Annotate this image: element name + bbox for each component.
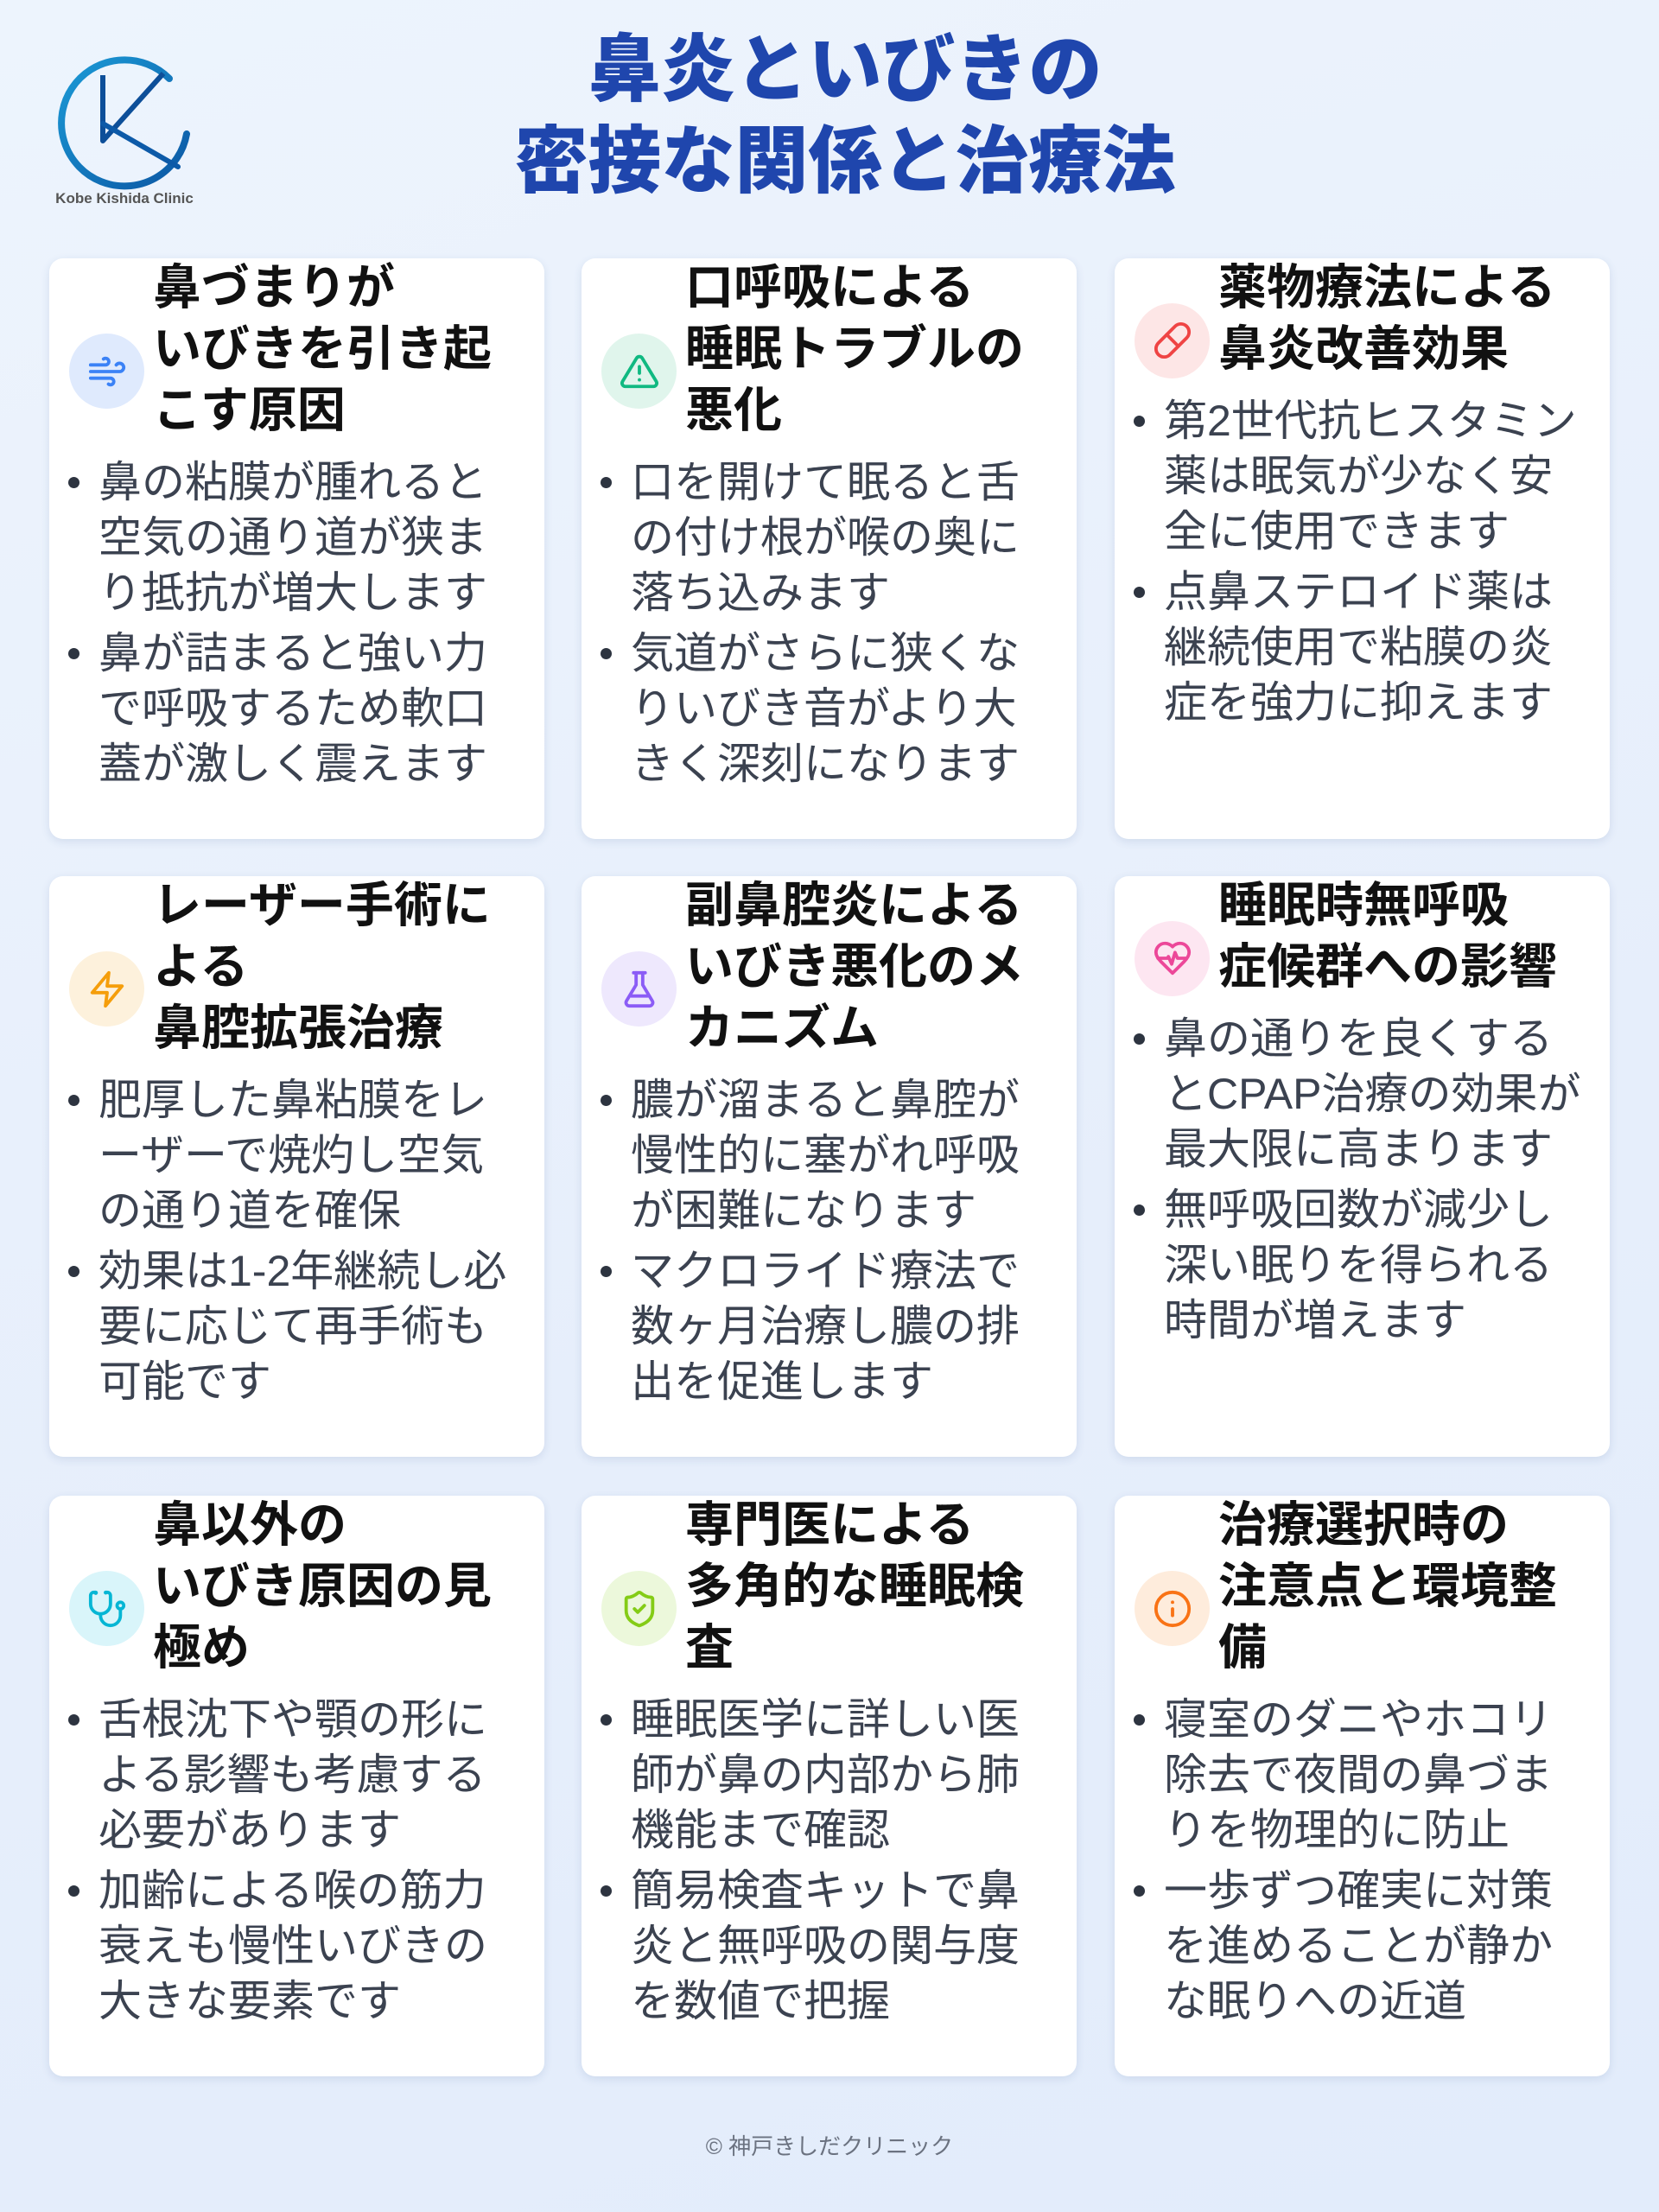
panel: card 5: 出を促進します	[631, 1357, 933, 1406]
panel: card 6: とCPAP治療の効果が	[1164, 1070, 1580, 1118]
panel: card 7: 舌根沈下や顎の形に	[99, 1695, 487, 1744]
panel: card 8: 多角的な睡眠検	[685, 1559, 1024, 1613]
panel: card 6: 深い眠りを得られる	[1164, 1241, 1553, 1289]
panel: card 7: 衰えも慢性いびきの	[99, 1922, 487, 1970]
panel: card 5: いびき悪化のメ	[685, 939, 1024, 994]
panel: card 1: 鼻づまりが	[153, 260, 395, 315]
panel: card 8: 炎と無呼吸の関与度	[631, 1922, 1020, 1970]
panel: card 3: 鼻炎改善効果	[1218, 321, 1509, 376]
panel: card 6: 時間が増えます	[1164, 1296, 1466, 1344]
icon: wind	[69, 334, 144, 409]
panel: card 4	[49, 876, 544, 1457]
panel: card 6: 睡眠時無呼吸	[1218, 878, 1509, 932]
panel: card 8: 師が鼻の内部から肺	[631, 1751, 1020, 1799]
panel: card 5: 慢性的に塞がれ呼吸	[631, 1131, 1020, 1179]
panel: card 7: 極め	[153, 1620, 250, 1675]
panel: card 1: いびきを引き起	[153, 321, 492, 376]
panel: card 6: 最大限に高まります	[1164, 1125, 1553, 1173]
panel: card 4: レーザー手術に	[153, 878, 491, 932]
panel: card 6: 鼻の通りを良くする	[1164, 1014, 1553, 1063]
panel: card 5: カニズム	[685, 1001, 879, 1055]
panel: card 8: 査	[685, 1620, 734, 1675]
panel: card 7: 鼻以外の	[153, 1497, 346, 1552]
panel: card 2: の付け根が喉の奥に	[631, 513, 1020, 562]
title	[514, 29, 1175, 203]
panel: card 2: きく深刻になります	[631, 740, 1020, 788]
logo	[55, 56, 194, 207]
panel: card 9: な眠りへの近道	[1164, 1977, 1466, 2025]
panel: card 4: 鼻腔拡張治療	[153, 1001, 443, 1055]
panel: card 2: 睡眠トラブルの	[685, 321, 1024, 376]
panel: card 1: 鼻の粘膜が腫れると	[99, 458, 487, 506]
icon: info	[1135, 1571, 1210, 1646]
panel: card 2: りいびき音がより大	[631, 684, 1016, 733]
panel: card 4: 要に応じて再手術も	[99, 1302, 487, 1351]
panel: card 5: 副鼻腔炎による	[685, 878, 1022, 932]
panel: card 8: 専門医による	[685, 1497, 974, 1552]
panel: card 3: 継続使用で粘膜の炎	[1164, 623, 1553, 671]
panel: card 6: 症候群への影響	[1218, 939, 1557, 994]
panel: card 8: を数値で把握	[631, 1977, 890, 2025]
panel: card 3: 全に使用できます	[1164, 507, 1510, 556]
panel: card 1: こす原因	[153, 383, 346, 437]
panel: card 7	[49, 1496, 544, 2076]
panel: card 2: 悪化	[685, 383, 782, 437]
panel: card 8: 機能まで確認	[631, 1806, 890, 1854]
panel: card 2: 口を開けて眠ると舌	[631, 458, 1020, 506]
panel: card 9: 除去で夜間の鼻づま	[1164, 1751, 1553, 1799]
panel: card 2: 落ち込みます	[631, 569, 890, 617]
panel: card 4: ーザーで焼灼し空気	[99, 1131, 484, 1179]
panel: card 1: 鼻が詰まると強い力	[99, 629, 487, 677]
panel: card 4: 肥厚した鼻粘膜をレ	[99, 1076, 487, 1124]
icon: shield check	[601, 1571, 677, 1646]
panel: card 9: りを物理的に防止	[1164, 1806, 1510, 1854]
panel: card 5: 数ヶ月治療し膿の排	[631, 1302, 1020, 1351]
panel: card 5	[582, 876, 1077, 1457]
panel: card 9: 注意点と環境整	[1218, 1559, 1557, 1613]
icon: stethoscope	[69, 1571, 144, 1646]
panel: card 8: 簡易検査キットで鼻	[631, 1866, 1020, 1915]
panel: card 2: 気道がさらに狭くな	[631, 629, 1020, 677]
panel: card 7: 大きな要素です	[99, 1977, 401, 2025]
panel: card 7: よる影響も考慮する	[99, 1751, 486, 1799]
logo: Kobe Kishida Clinic	[55, 190, 194, 207]
panel: card 1: 蓋が激しく震えます	[99, 740, 487, 788]
panel: card 1: 空気の通り道が狭ま	[99, 513, 487, 562]
panel: card 4: よる	[153, 939, 248, 994]
panel: card 2: 口呼吸による	[685, 260, 974, 315]
panel: card 5: マクロライド療法で	[631, 1247, 1020, 1295]
panel: card 3	[1115, 258, 1610, 839]
panel: card 7: いびき原因の見	[153, 1559, 492, 1613]
panel: card 8	[582, 1496, 1077, 2076]
panel: card 1: で呼吸するため軟口	[99, 684, 487, 733]
panel: card 3: 薬は眠気が少なく安	[1164, 452, 1553, 500]
panel: card 5: 膿が溜まると鼻腔が	[631, 1076, 1020, 1124]
icon: pill	[1135, 302, 1210, 378]
panel: card 9: を進めることが静か	[1164, 1922, 1553, 1970]
panel: card 4: の通り道を確保	[99, 1186, 401, 1235]
panel: card 9: 備	[1218, 1620, 1267, 1675]
panel: card 1: り抵抗が増大します	[99, 569, 487, 617]
panel: card 9	[1115, 1496, 1610, 2076]
icon: heart pulse	[1135, 921, 1210, 995]
icon: flask	[601, 951, 677, 1027]
panel: card 3: 薬物療法による	[1218, 260, 1555, 315]
footer: © 神戸きしだクリニック	[706, 2133, 953, 2159]
panel: card 4: 効果は1-2年継続し必	[99, 1247, 506, 1295]
panel: card 2	[582, 258, 1077, 839]
panel: card 1	[49, 258, 544, 839]
panel: card 3: 症を強力に抑えます	[1164, 678, 1553, 727]
panel: card 9: 一歩ずつ確実に対策	[1164, 1866, 1553, 1915]
panel: card 6: 無呼吸回数が減少し	[1164, 1185, 1553, 1234]
title: 鼻炎といびきの	[588, 29, 1103, 111]
panel: card 7: 必要があります	[99, 1806, 401, 1854]
panel: card 3: 第2世代抗ヒスタミン	[1164, 397, 1577, 445]
panel: card 7: 加齢による喉の筋力	[99, 1866, 486, 1915]
title: 密接な関係と治療法	[514, 121, 1175, 203]
panel: card 8: 睡眠医学に詳しい医	[631, 1695, 1020, 1744]
panel: card 3: 点鼻ステロイド薬は	[1164, 568, 1553, 616]
panel: card 5: が困難になります	[631, 1186, 976, 1235]
panel: card 9: 治療選択時の	[1218, 1497, 1509, 1552]
panel: card 6	[1115, 876, 1610, 1457]
icon: zap	[69, 951, 144, 1027]
icon: warning	[601, 334, 677, 409]
panel: card 9: 寝室のダニやホコリ	[1164, 1695, 1553, 1744]
panel: card 4: 可能です	[99, 1357, 271, 1406]
